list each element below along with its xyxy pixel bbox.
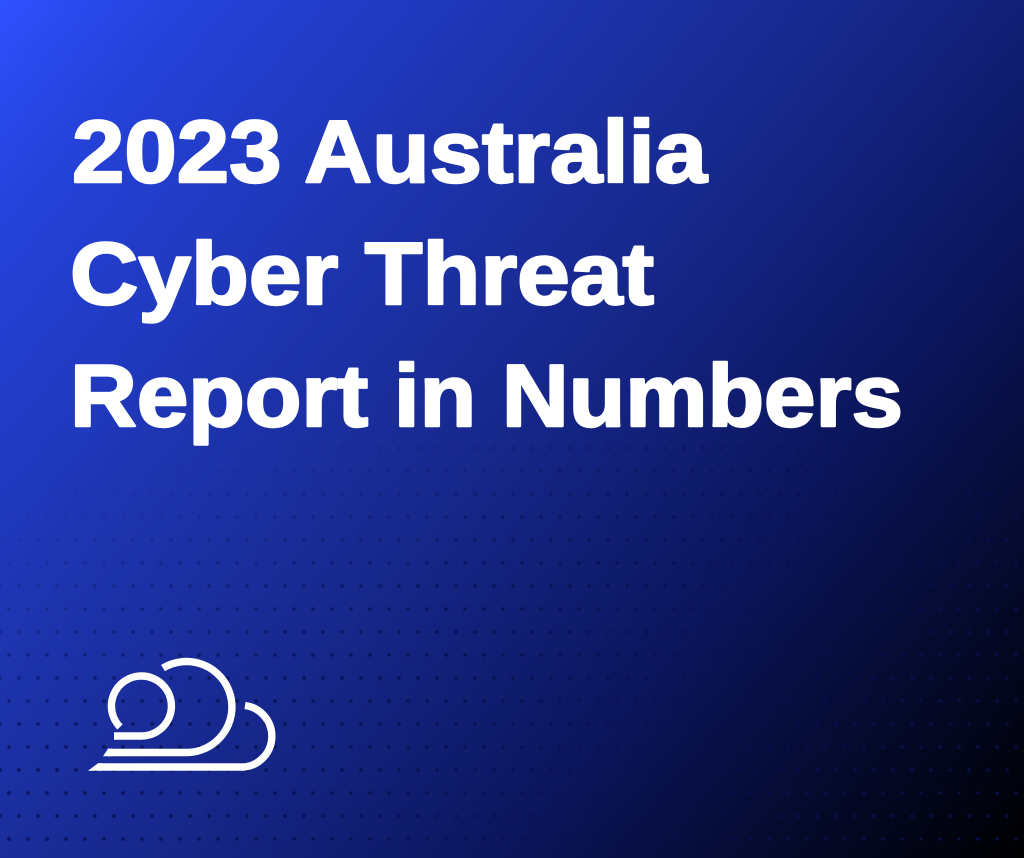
middle swirl [108,662,232,752]
title line 2: Cyber Threat [70,224,654,323]
line tips [88,749,112,771]
dotted texture [0,440,1024,858]
title line 3: Report in Numbers [70,346,903,445]
title [70,102,903,445]
small swirl [111,676,171,736]
large swirl [98,706,272,767]
title line 1: 2023 Australia [72,102,708,201]
icon: cloud logo [88,662,272,771]
